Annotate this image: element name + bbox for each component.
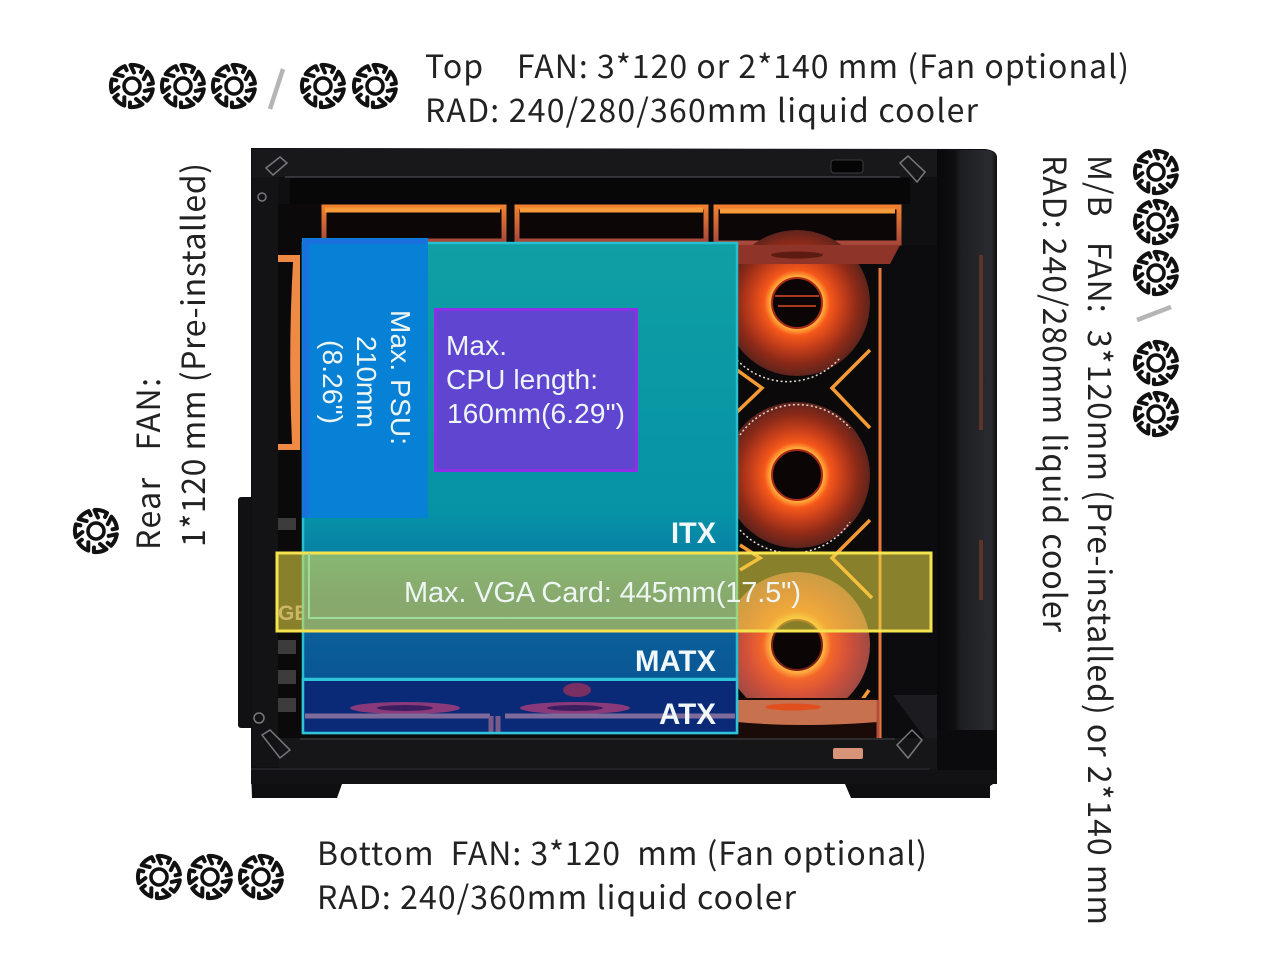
top fan under glow xyxy=(737,245,900,264)
bottom fan strip xyxy=(737,698,878,740)
text: bottom fan and radiator support xyxy=(317,829,927,919)
PC case photo illustration xyxy=(238,148,997,798)
MATX label: MATX xyxy=(635,645,716,678)
ITX label: ITX xyxy=(671,517,716,550)
ATX label: ATX xyxy=(659,698,716,731)
text: rear fan support: 1*120 mm (Pre-installed) xyxy=(169,163,215,547)
icons: motherboard side fans xyxy=(1133,150,1179,438)
PSU clearance box: (8.26") xyxy=(317,340,348,424)
text: bottom fan and radiator support: RAD: 240/360mm liquid cooler xyxy=(317,873,797,919)
text: bottom fan and radiator support: Bottom FAN: 3*120 mm (Fan optional) xyxy=(317,829,927,875)
text: top fan and radiator support xyxy=(425,42,1129,132)
top slot xyxy=(831,160,863,173)
top fans frames xyxy=(324,207,899,243)
glass front panel xyxy=(937,150,997,745)
PSU clearance box xyxy=(302,238,428,518)
CPU cooler clearance box: CPU length: xyxy=(446,364,598,395)
ITX bottom edge line xyxy=(309,553,737,618)
lower frame rail xyxy=(278,738,937,770)
case body xyxy=(251,148,997,798)
icon: rear fan xyxy=(73,509,119,555)
top rail xyxy=(252,149,937,177)
VGA card clearance box xyxy=(277,553,931,631)
CPU cooler clearance box: Max. xyxy=(446,330,507,361)
CPU cooler clearance box xyxy=(436,310,636,470)
ATX area xyxy=(304,680,737,732)
text: top fan and radiator support: RAD: 240/280/360mm liquid cooler xyxy=(425,86,979,132)
separator slash xyxy=(1137,307,1171,320)
interior xyxy=(278,204,881,740)
VGA card clearance box: Max. VGA Card: 445mm(17.5") xyxy=(404,577,801,609)
text: motherboard side fan and radiator support: M/B FAN: 3*120mm (Pre-installed) or 2*140 mm xyxy=(1078,155,1124,925)
CPU cooler clearance box: 160mm(6.29") xyxy=(447,398,625,429)
ITX / MATX area xyxy=(303,243,737,733)
x-shaped fan bracket lights xyxy=(737,350,872,700)
right orange edge light xyxy=(878,268,882,740)
bottom connector xyxy=(833,748,863,759)
rear io strips xyxy=(278,518,296,712)
text: top fan and radiator support: Top FAN: 3*120 or 2*140 mm (Fan optional) xyxy=(425,42,1129,88)
left pillar xyxy=(252,177,278,767)
text: rear fan support xyxy=(124,163,215,550)
PSU clearance box: Max. PSU: xyxy=(385,310,416,445)
ATX box outline xyxy=(303,679,737,733)
right side dark pillar xyxy=(882,245,937,745)
text: motherboard side fan and radiator support xyxy=(1033,155,1124,925)
GB logo fragment: GB xyxy=(278,602,310,625)
right fans xyxy=(724,230,870,718)
icons: bottom fans xyxy=(136,855,284,901)
rear vent panel xyxy=(278,255,300,450)
board overlay: motherboard sizes xyxy=(303,243,737,733)
corner screws xyxy=(254,156,925,758)
text: motherboard side fan and radiator support: RAD: 240/280mm liquid cooler xyxy=(1033,155,1079,633)
text: rear fan support: Rear FAN: xyxy=(124,378,170,550)
PSU clearance box: 210mm xyxy=(351,336,382,428)
rear bracket xyxy=(238,497,254,728)
separator slash xyxy=(270,69,283,109)
icons: top fans xyxy=(109,64,398,110)
